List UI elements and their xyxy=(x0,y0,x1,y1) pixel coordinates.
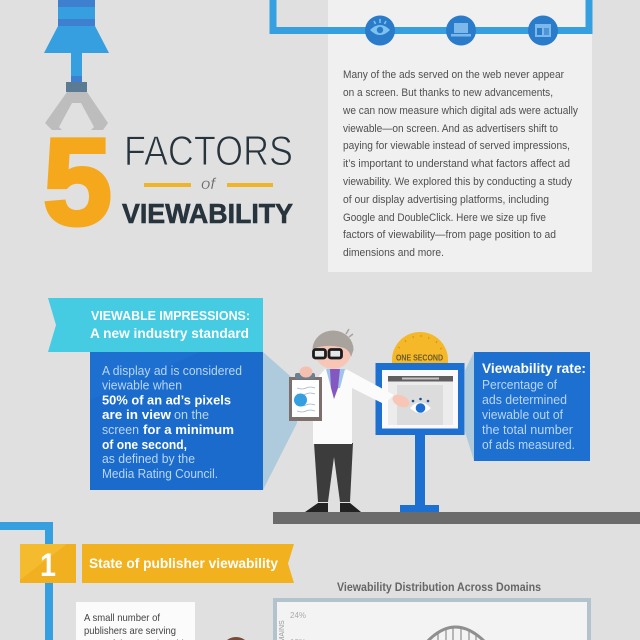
illustration: timer dome: ONE SECOND xyxy=(396,354,443,362)
panel: viewability rate: the total number xyxy=(482,423,573,437)
text block: introduction copy: viewable—on screen. And as advertisers shift to xyxy=(343,123,558,135)
clipboard xyxy=(289,366,322,421)
title: 5 Factors of Viewability xyxy=(43,114,293,252)
text block: introduction copy: it’s important to understand what factors affect ad xyxy=(343,158,570,170)
text block: introduction copy: paying for viewable instead of served impressions, xyxy=(343,140,570,152)
panel: viewable impressions definition: of one second, xyxy=(102,438,187,452)
banner: viewable impressions heading: VIEWABLE IMPRESSIONS: xyxy=(91,308,250,323)
panel: viewability rate: of ads measured. xyxy=(482,438,575,452)
heading word: FACTORS: FACTORS xyxy=(124,127,293,174)
text block: introduction copy: viewability. We explored this by conducting a study xyxy=(343,176,573,188)
text block: section 1 copy xyxy=(76,602,195,640)
chart title: Viewability Distribution Across Domains xyxy=(337,580,541,594)
text block: section 1 copy: A small number of xyxy=(84,612,160,624)
distribution curve xyxy=(426,627,486,640)
text block: introduction copy xyxy=(342,69,579,259)
heading word: VIEWABILITY: VIEWABILITY xyxy=(122,198,293,229)
section 1 number badge xyxy=(20,544,76,583)
shirt and tie xyxy=(326,369,345,399)
icon: eye xyxy=(410,398,431,413)
panel: viewable impressions definition: Media Rating Council. xyxy=(102,467,218,481)
text block: introduction copy: we can now measure which digital ads were actually xyxy=(342,105,579,117)
text block: introduction copy: factors of viewability—from page position to ad xyxy=(343,229,556,241)
icon: head at section edge xyxy=(221,637,251,640)
text block: introduction copy: on a screen. But thanks to new advancements, xyxy=(343,87,553,99)
section 1 banner xyxy=(82,544,294,583)
neck and head xyxy=(312,329,354,369)
text block: section 1 copy: publishers are serving xyxy=(84,625,176,637)
section connector line xyxy=(0,526,49,640)
panel: viewable impressions definition xyxy=(90,352,263,490)
icon: machine claw holding the number 5 xyxy=(44,0,109,130)
trousers xyxy=(314,443,353,502)
text block: introduction copy: dimensions and more. xyxy=(343,247,444,259)
panel: viewability rate xyxy=(474,352,590,461)
icon: laptop xyxy=(446,16,476,46)
illustration: scientist with clipboard xyxy=(289,329,411,512)
banner: viewable impressions heading xyxy=(48,298,263,352)
frame: blue line with icons xyxy=(273,0,589,46)
glasses xyxy=(314,350,342,358)
panel: introduction xyxy=(328,0,592,272)
panel: viewability rate: Viewability rate: xyxy=(482,361,586,376)
chart: viewability distribution xyxy=(273,598,591,640)
icon: browser window xyxy=(528,16,558,46)
panel: viewability rate: ads determined xyxy=(482,393,567,407)
panel: viewable impressions definition: for a minimum xyxy=(143,423,234,437)
y-axis labels: 24% xyxy=(290,610,306,620)
panel: viewable impressions definition: A display ad is considered xyxy=(102,364,242,378)
heading word: of, with rules xyxy=(144,176,273,193)
heading word: of, with rules: of xyxy=(201,176,217,193)
y-axis labels xyxy=(290,610,306,640)
panel: viewable impressions definition: viewable when xyxy=(102,378,182,392)
section 1 banner: State of publisher viewability xyxy=(89,556,278,571)
panel: viewable impressions definition: are in view xyxy=(102,408,171,422)
panel: viewable impressions definition: on the xyxy=(174,408,209,422)
light beam from definition box xyxy=(263,352,297,490)
ground bar xyxy=(273,512,640,524)
panel: viewable impressions definition: screen xyxy=(102,423,139,437)
shoes xyxy=(305,503,361,512)
large number 5: 5 xyxy=(43,114,112,252)
banner: viewable impressions heading: A new industry standard xyxy=(90,326,249,341)
panel: viewability rate: Percentage of xyxy=(482,378,557,392)
pointing arm xyxy=(346,369,394,404)
section 1 number badge: 1 xyxy=(40,547,56,583)
panel: viewability rate: viewable out of xyxy=(482,408,563,422)
panel: viewable impressions definition: 50% of an ad’s pixels xyxy=(102,394,231,408)
lab coat xyxy=(313,369,352,444)
illustration: ad display on stand xyxy=(376,363,464,512)
pointing hand xyxy=(391,392,411,410)
light beam to viewability rate box xyxy=(465,352,474,461)
illustration: timer dome xyxy=(392,332,448,364)
text block: introduction copy: Google and DoubleClick. Here we size up five xyxy=(343,212,546,224)
icon: eye xyxy=(365,16,395,46)
text block: introduction copy: of our display advertising platforms, including xyxy=(343,194,549,206)
text block: introduction copy: Many of the ads served on the web never appear xyxy=(343,69,564,81)
panel: viewable impressions definition: as defined by the xyxy=(102,452,195,466)
